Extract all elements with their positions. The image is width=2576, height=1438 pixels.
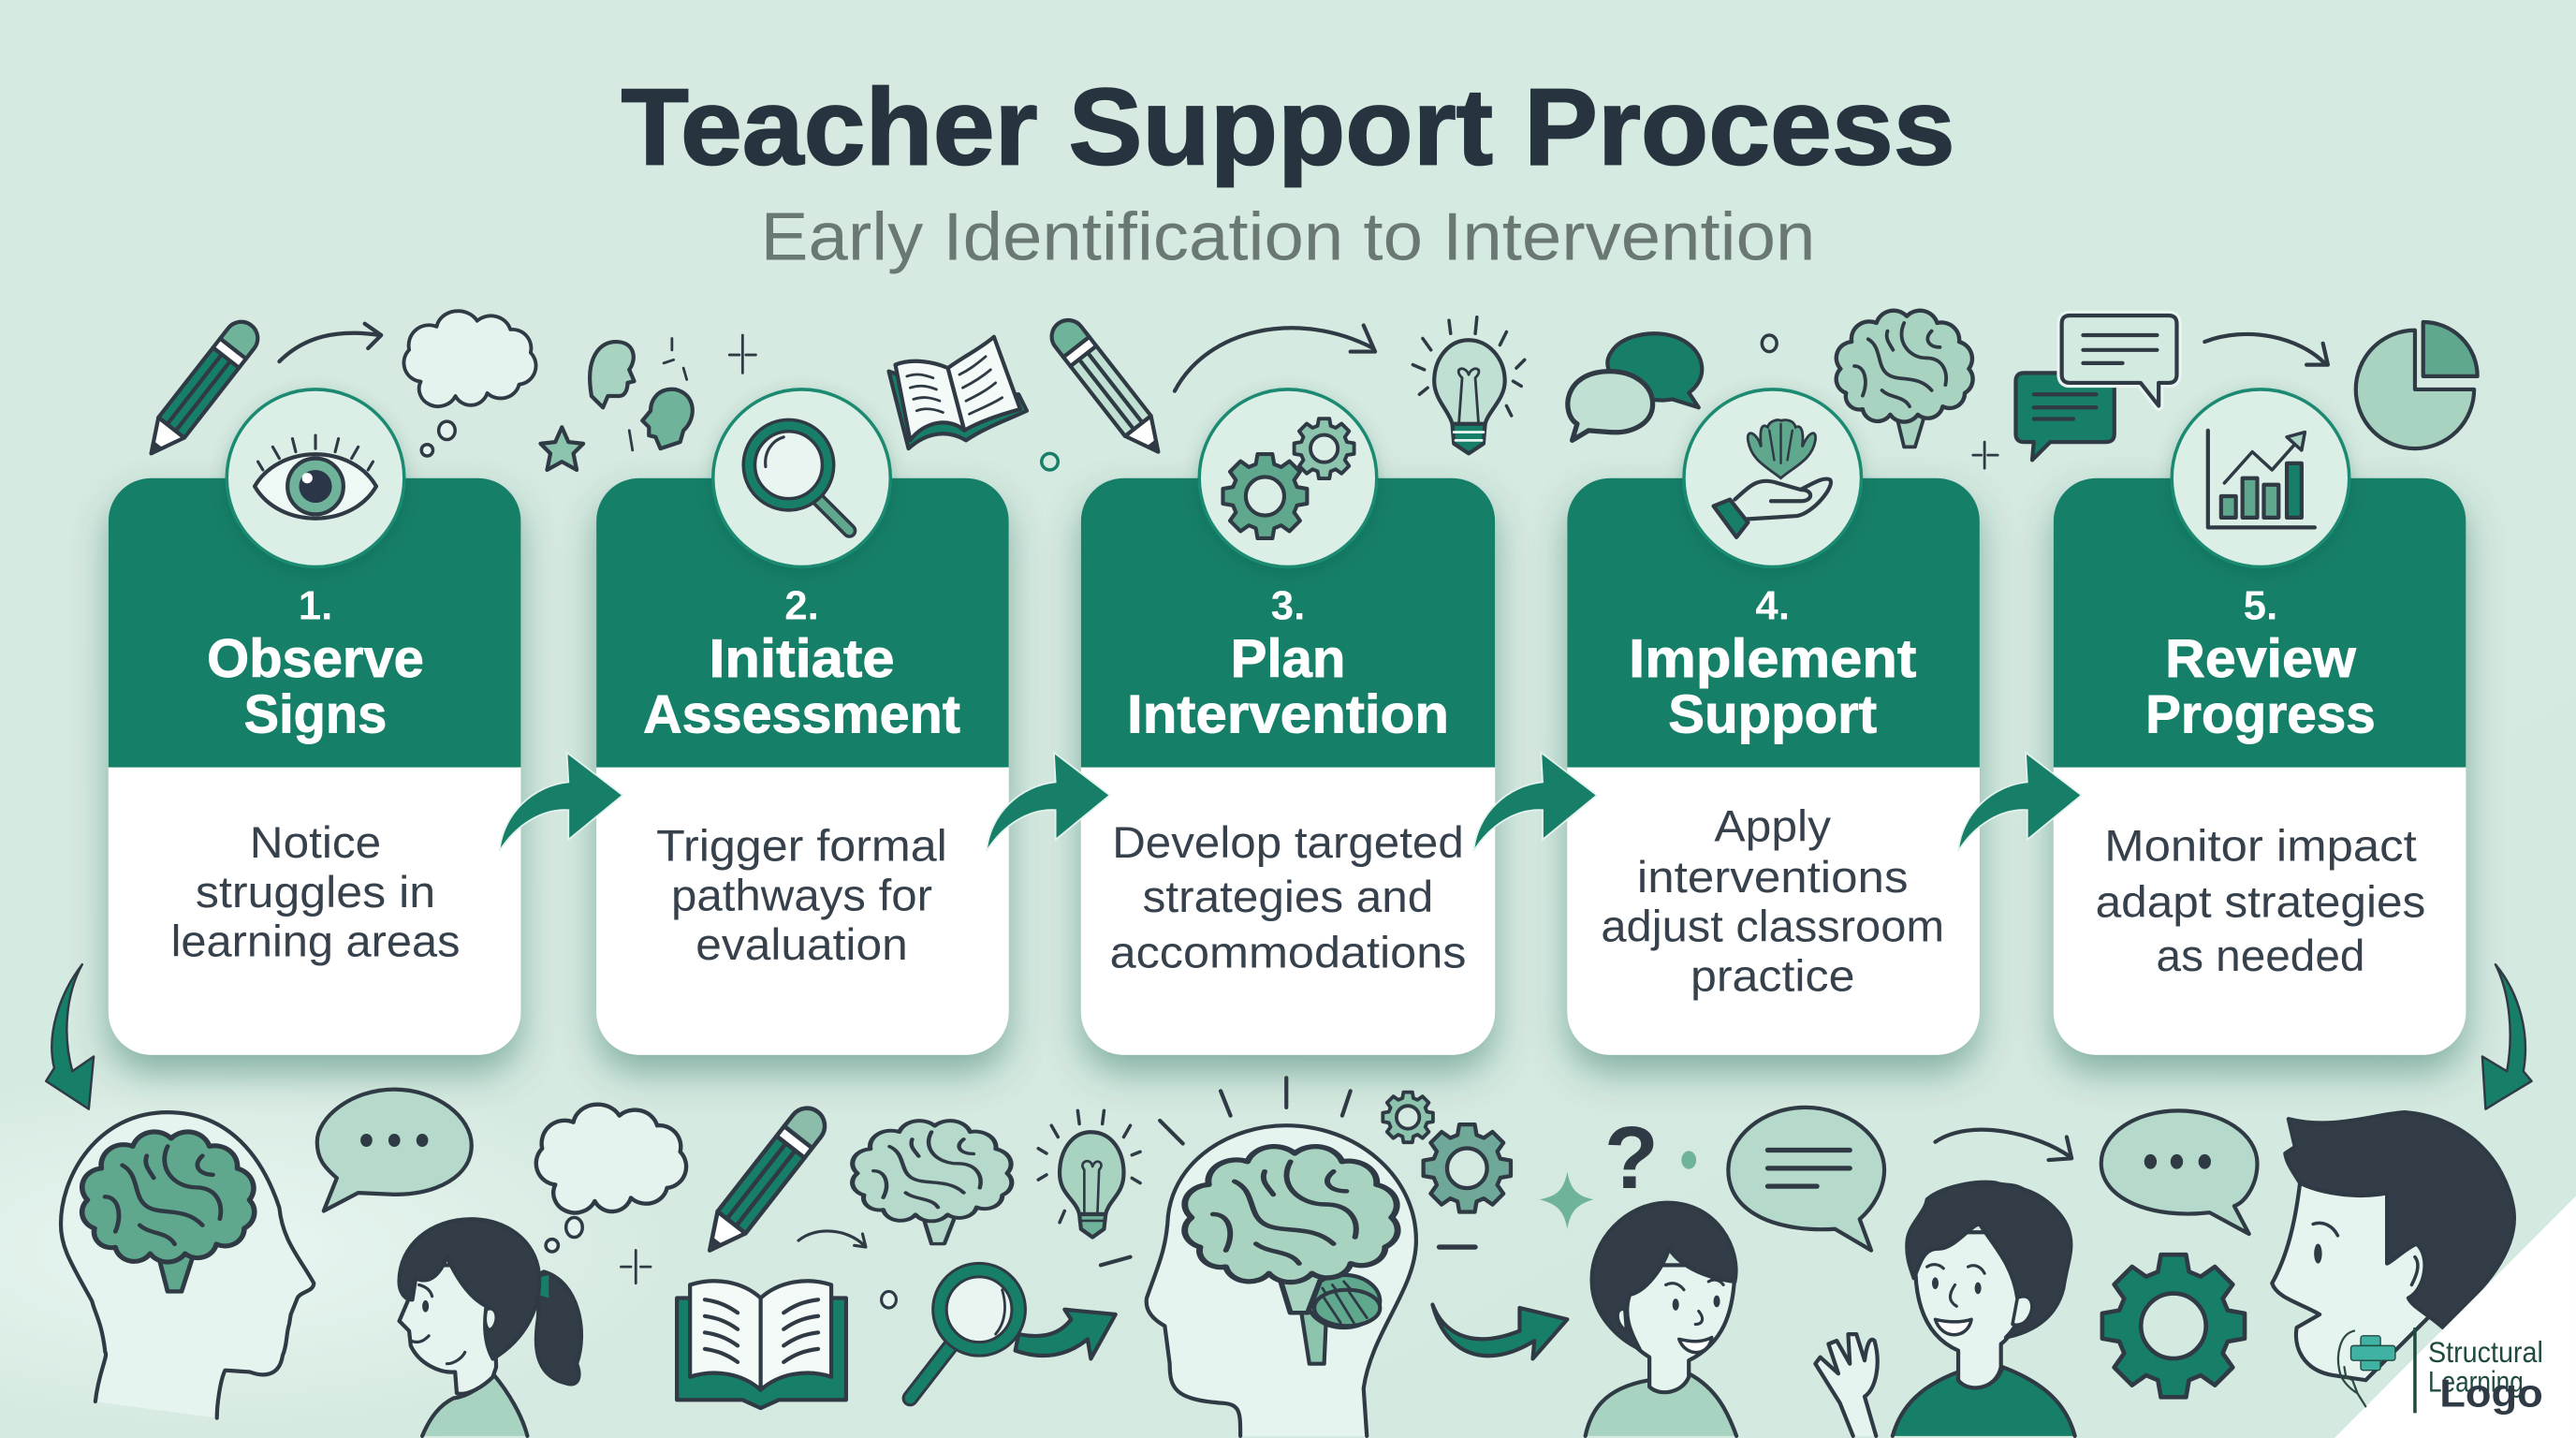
top doodle: speech bubbles: [1568, 333, 1702, 440]
heading: Signs: [244, 685, 387, 745]
top doodle: talking heads: [590, 339, 693, 450]
heading: Progress: [2145, 685, 2376, 745]
logo: wordmark: Structural: [2428, 1335, 2543, 1369]
description: learning areas: [171, 917, 460, 966]
illustration: dash: [1439, 1246, 1475, 1249]
description: interventions: [1637, 853, 1909, 902]
panel: step 5 review progress: [2054, 389, 2466, 1055]
description: adjust classroom: [1601, 902, 1944, 952]
illustration: question mark: ?: [1604, 1108, 1659, 1208]
illustration: speech bubble with dots: [2101, 1110, 2257, 1234]
top doodle: pencil light: [1046, 314, 1171, 462]
illustration: magnifier with arrow: [910, 1270, 1116, 1399]
illustration: curved arrow: [1432, 1304, 1567, 1358]
number: 2.: [784, 583, 819, 629]
arrow: left downward: [46, 964, 94, 1109]
heading: Support: [1668, 685, 1877, 745]
illustration: speech bubble with dots: [317, 1090, 472, 1211]
illustration: sparkle: [1540, 1171, 1593, 1229]
description: Apply: [1714, 802, 1831, 852]
top doodle: star: [540, 427, 583, 470]
panel: step 2 initiate assessment: [596, 389, 1009, 1055]
number: 5.: [2244, 583, 2277, 629]
illustration: girl with ponytail: [400, 1219, 581, 1436]
illustration: arrow: [1935, 1130, 2071, 1160]
soft background glow: [0, 1060, 707, 1438]
illustration: boy waving: [1815, 1182, 2075, 1436]
illustration: thought cloud: [536, 1105, 686, 1252]
card shell: [2054, 478, 2466, 1055]
illustration: small arc arrow: [798, 1231, 866, 1247]
description: evaluation: [695, 920, 908, 970]
panel: step 4 implement support: [1567, 389, 1980, 1055]
heading: Intervention: [1127, 685, 1449, 745]
arrow: right downward: [2482, 964, 2532, 1109]
arrow: step 4 to 5: [1958, 753, 2082, 851]
description: Notice: [250, 818, 381, 868]
illustration: head with detailed brain: [1147, 1078, 1416, 1436]
logo: wordmark: Learning: [2428, 1365, 2524, 1399]
icon: magnifying glass: [713, 389, 890, 566]
card shell: [1567, 478, 1980, 1055]
top doodle: light bulb: [1412, 317, 1525, 453]
icon: eye: [227, 389, 404, 566]
description: Develop targeted: [1112, 818, 1464, 868]
top doodle: arrow: [2204, 334, 2328, 365]
description: Monitor impact: [2104, 822, 2417, 872]
illustration: light bulb: [1038, 1110, 1140, 1238]
description: Trigger formal: [656, 822, 947, 872]
heading: Review: [2165, 629, 2357, 689]
corner triangle: [2334, 1196, 2576, 1438]
top doodle: chat bubbles: [2015, 315, 2176, 460]
number: 1.: [299, 583, 332, 629]
number: 4.: [1755, 583, 1790, 629]
top doodle: pencil: [139, 315, 264, 463]
illustration: dot: [1681, 1151, 1696, 1169]
top doodle: small ring: [1042, 453, 1058, 470]
description: accommodations: [1110, 929, 1466, 978]
top doodle: thought cloud: [403, 311, 536, 456]
heading: Assessment: [643, 685, 960, 745]
top doodle: curved arrow: [279, 324, 381, 361]
icon: helping hand: [1684, 389, 1862, 566]
top doodle: pie chart: [2356, 322, 2478, 448]
top doodle: large arc arrow: [1175, 325, 1375, 391]
logo: [2338, 1328, 2543, 1415]
arrow: step 2 to 3: [987, 753, 1110, 851]
description: as needed: [2157, 932, 2364, 981]
logo: wordmark: [2428, 1335, 2543, 1415]
heading: Observe: [207, 629, 424, 689]
icon: progress chart: [2172, 389, 2349, 566]
description: struggles in: [196, 868, 435, 917]
top doodle: open book: [889, 337, 1027, 448]
illustration: ring: [882, 1291, 896, 1308]
icon: gears: [1199, 389, 1377, 566]
top doodle: sparkle plus: [729, 335, 755, 373]
illustration: head with brain: [61, 1112, 314, 1418]
description: strategies and: [1143, 873, 1433, 922]
top doodle: brain: [1837, 311, 1973, 447]
illustration: dash: [1101, 1257, 1131, 1265]
top doodle: small ring: [1762, 335, 1777, 352]
card shell: [1081, 478, 1495, 1055]
description: practice: [1690, 951, 1854, 1001]
illustration: plus: [621, 1251, 651, 1284]
logo: wordmark: Logo: [2439, 1371, 2543, 1415]
card shell: [596, 478, 1009, 1055]
heading: Plan: [1231, 629, 1345, 689]
number: 3.: [1271, 583, 1305, 629]
heading: Implement: [1629, 629, 1916, 689]
arrow: step 3 to 4: [1473, 753, 1597, 851]
top doodle: plus: [1973, 442, 1998, 468]
description: pathways for: [671, 871, 932, 920]
logo: divider: [2413, 1328, 2417, 1413]
logo: plus mark: [2351, 1336, 2395, 1371]
illustration: open book: [677, 1281, 846, 1408]
illustration: boy with dark hair: [1586, 1203, 1736, 1436]
heading: Initiate: [709, 629, 895, 689]
title: Teacher Support Process: [621, 66, 1955, 188]
logo: head mark: [2338, 1331, 2365, 1406]
illustration: man profile: [2272, 1112, 2514, 1380]
illustration: pencil: [695, 1101, 832, 1261]
card shell: [109, 478, 520, 1055]
illustration: brain: [853, 1121, 1012, 1244]
illustration: speech bubble with lines: [1728, 1108, 1884, 1251]
illustration: large teal gear: [2102, 1255, 2245, 1397]
panel: step 3 plan intervention: [1081, 389, 1495, 1055]
arrow: step 1 to 2: [500, 753, 622, 851]
illustration: gears: [1383, 1093, 1511, 1211]
description: adapt strategies: [2096, 877, 2425, 927]
subtitle: Early Identification to Intervention: [761, 199, 1815, 274]
panel: step 1 observe signs: [109, 389, 520, 1055]
